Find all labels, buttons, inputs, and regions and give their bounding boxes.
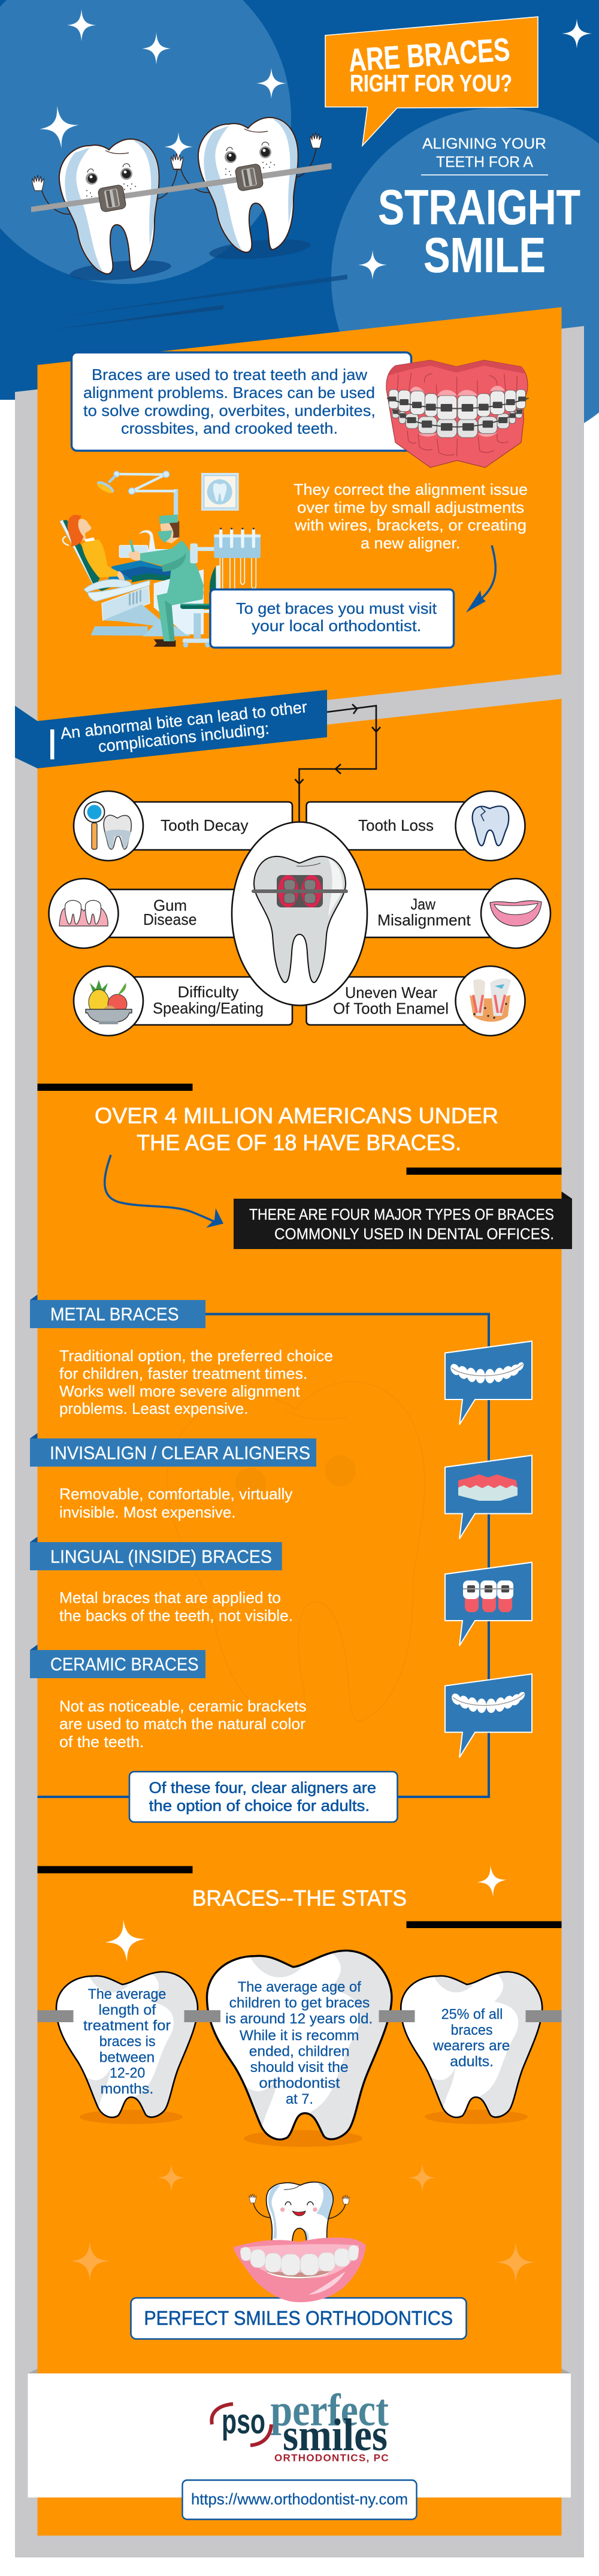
- item: tooth decay: [74, 791, 248, 861]
- item: difficulty speaking and eating: Difficulty: [177, 983, 238, 1001]
- logo: perfect smiles orthodontics: perfect: [271, 2385, 389, 2436]
- chair back: [60, 520, 100, 589]
- callout: clear aligners for adults: [129, 1772, 398, 1822]
- ribbon: abnormal bite: An abnormal bite can lead to other: [59, 698, 308, 743]
- illustration: dentist with patient: [60, 471, 261, 647]
- header sparkles: [37, 9, 592, 280]
- callout: clear aligners for adults: Of these four, clear aligners are: [149, 1779, 376, 1797]
- callout: visit your orthodontist: To get braces you must visit: [236, 599, 437, 617]
- stat tooth: adult wearers: [401, 1971, 545, 2124]
- stat tooth: average age: children to get braces: [229, 1995, 370, 2011]
- section: metal braces: [30, 1295, 532, 1425]
- section: lingual braces: LINGUAL (INSIDE) BRACES: [50, 1546, 272, 1567]
- item: difficulty speaking and eating: Speaking/Eating: [153, 999, 264, 1017]
- speech bubble: are braces right for you: RIGHT FOR YOU?: [350, 71, 512, 97]
- callout: four major types: THERE ARE FOUR MAJOR TYPES OF BRACES: [249, 1205, 554, 1223]
- stat tooth: adult wearers: wearers are: [432, 2038, 510, 2054]
- callout: four major types: [234, 1192, 572, 1249]
- item: gum disease: Disease: [143, 910, 196, 928]
- complication pills: [83, 802, 516, 1025]
- title: aligning your teeth for a straight smile: SMILE: [423, 227, 546, 283]
- section: metal braces: for children, faster treatment times.: [59, 1364, 307, 1382]
- stat tooth: treatment length: The average: [88, 1986, 166, 2002]
- section: invisalign: invisible. Most expensive.: [59, 1503, 236, 1521]
- instrument tray: [190, 528, 261, 596]
- title: aligning your teeth for a straight smile: TEETH FOR A: [436, 153, 533, 170]
- section: lingual braces: [30, 1537, 532, 1646]
- website url box: [182, 2480, 417, 2520]
- item: uneven wear of tooth enamel: [333, 966, 525, 1036]
- illustration: smiling tooth: [249, 2182, 349, 2243]
- callout: perfect smiles orthodontics: PERFECT SMILES ORTHODONTICS: [144, 2307, 453, 2329]
- logo: perfect smiles orthodontics: smiles: [283, 2410, 388, 2460]
- section: lingual braces: the backs of the teeth, not visible.: [59, 1606, 293, 1624]
- stat tooth: treatment length: between: [99, 2050, 155, 2065]
- stat tooth: adult wearers: 25% of all: [441, 2007, 503, 2022]
- item: difficulty speaking and eating: [74, 966, 264, 1036]
- stat tooth: treatment length: braces is: [99, 2034, 156, 2050]
- stat tooth: average age: [207, 1950, 395, 2147]
- icon: dental model with braces: [386, 360, 529, 467]
- orange panel: upper: [37, 307, 562, 732]
- callout: visit your orthodontist: your local orthodontist.: [252, 617, 422, 635]
- item: tooth loss: [358, 791, 525, 861]
- callout: perfect smiles orthodontics: [131, 2298, 466, 2339]
- watermark tooth: [167, 1381, 425, 1728]
- callout: four major types: COMMONLY USED IN DENTAL OFFICES.: [274, 1225, 554, 1243]
- logo: perfect smiles orthodontics: [211, 2385, 389, 2463]
- stat tooth: average age: should visit the: [250, 2059, 349, 2076]
- item: uneven wear of tooth enamel: Uneven Wear: [345, 984, 437, 1002]
- lamp arm: [95, 471, 178, 516]
- stat tooth: average age: at 7.: [286, 2091, 313, 2107]
- callout: what braces treat: alignment problems. Braces can be used: [83, 384, 375, 402]
- orange panel: lower: [37, 699, 562, 2536]
- illustration: two teeth with braces: [31, 117, 332, 283]
- section: ceramic braces: Not as noticeable, ceramic brackets: [59, 1697, 307, 1715]
- callout: clear aligners for adults: the option of choice for adults.: [149, 1797, 370, 1815]
- stat tooth: treatment length: treatment for: [83, 2017, 171, 2034]
- heading: braces the stats: BRACES--THE STATS: [192, 1886, 407, 1911]
- callout: visit your orthodontist: [210, 590, 454, 647]
- speed streaks: [53, 275, 347, 330]
- stat tooth: adult wearers: braces: [450, 2022, 492, 2038]
- section: lingual braces: Metal braces that are applied to: [59, 1588, 281, 1606]
- sink: [119, 530, 168, 559]
- stat tooth: treatment length: [56, 1971, 201, 2124]
- dentist: [128, 514, 204, 647]
- website url box: https://www.orthodontist-ny.com: [191, 2490, 408, 2508]
- callout: what braces treat: crossbites, and crooked teeth.: [121, 420, 338, 438]
- stat tooth: average age: While it is recomm: [240, 2028, 359, 2044]
- stat tooth: average age: ended, children: [249, 2044, 350, 2059]
- decorative bars: stats heading: [37, 1866, 562, 1928]
- item: gum disease: [49, 879, 196, 948]
- section: ceramic braces: CERAMIC BRACES: [50, 1654, 199, 1675]
- section: invisalign: Removable, comfortable, virtually: [59, 1485, 293, 1503]
- wall poster: [201, 473, 239, 511]
- section: ceramic braces: of the teeth.: [59, 1733, 144, 1751]
- center tooth with bracket: [232, 822, 367, 1006]
- stat tooth: adult wearers: adults.: [450, 2053, 494, 2070]
- item: jaw misalignment: Misalignment: [377, 911, 471, 929]
- title: aligning your teeth for a straight smile: ALIGNING YOUR: [422, 135, 546, 152]
- decorative bars: heading: [37, 1084, 562, 1175]
- arrow: to orthodontist box: [466, 545, 495, 613]
- text block: how braces correct alignment: [294, 481, 528, 552]
- item: tooth decay: Tooth Decay: [161, 816, 248, 834]
- ribbon: abnormal bite: [15, 690, 327, 768]
- section: invisalign: [30, 1433, 532, 1539]
- text block: how braces correct alignment: They correct the alignment issue: [294, 481, 528, 499]
- arrows: ribbon to complications: [295, 704, 380, 822]
- item: jaw misalignment: [377, 879, 550, 948]
- illustration: smiling lips: [233, 2237, 366, 2302]
- callout: what braces treat: to solve crowding, overbites, underbites,: [83, 402, 376, 420]
- speech bubble: are braces right for you: [325, 17, 538, 146]
- patient: [68, 515, 176, 591]
- item: jaw misalignment: Jaw: [411, 895, 435, 913]
- stool: [180, 565, 220, 647]
- arrow: to four types callout: [105, 1155, 223, 1228]
- section: invisalign: INVISALIGN / CLEAR ALIGNERS: [50, 1442, 310, 1464]
- section: metal braces: Traditional option, the preferred choice: [59, 1347, 333, 1365]
- logo: perfect smiles orthodontics: pso: [222, 2402, 265, 2441]
- ribbon: abnormal bite: complications including:: [97, 719, 270, 756]
- logo: perfect smiles orthodontics: ORTHODONTICS, PC: [274, 2453, 388, 2463]
- item: uneven wear of tooth enamel: Of Tooth Enamel: [333, 1000, 449, 1018]
- stat tooth: average age: The average age of: [238, 1979, 361, 1995]
- stat tooth: treatment length: months.: [101, 2081, 153, 2097]
- section: ceramic braces: [30, 1645, 532, 1757]
- section: ceramic braces: are used to match the natural color: [59, 1715, 305, 1733]
- chair base: [84, 569, 204, 637]
- item: tooth loss: Tooth Loss: [358, 816, 434, 834]
- speech bubble: are braces right for you: ARE BRACES: [347, 32, 511, 79]
- stat tooth: average age: is around 12 years old.: [225, 2011, 373, 2027]
- section: metal braces: Works well more severe alignment: [59, 1382, 300, 1400]
- connector line: types of braces: [37, 1314, 489, 1797]
- callout: what braces treat: Braces are used to treat teeth and jaw: [92, 366, 367, 384]
- sparkles: stats: [70, 1863, 536, 2282]
- stat tooth: treatment length: 12-20: [110, 2065, 145, 2081]
- callout: what braces treat: [72, 352, 411, 451]
- heading: over 4 million americans: OVER 4 MILLION AMERICANS UNDER: [95, 1103, 498, 1128]
- header background: [0, 0, 599, 448]
- text block: how braces correct alignment: over time by small adjustments: [297, 499, 524, 517]
- title: aligning your teeth for a straight smile: [378, 135, 580, 283]
- heading: over 4 million americans: [95, 1103, 498, 1155]
- heading: over 4 million americans: THE AGE OF 18 HAVE BRACES.: [137, 1130, 461, 1155]
- section: metal braces: problems. Least expensive.: [59, 1399, 248, 1417]
- text block: how braces correct alignment: a new aligner.: [361, 534, 460, 552]
- section: metal braces: METAL BRACES: [50, 1304, 179, 1325]
- text block: how braces correct alignment: with wires, brackets, or creating: [294, 516, 527, 534]
- gray wire bands: [37, 2010, 562, 2022]
- white logo band: [28, 2369, 571, 2497]
- stat tooth: average age: orthodontist: [259, 2075, 340, 2092]
- item: gum disease: Gum: [153, 897, 187, 915]
- stat tooth: treatment length: length of: [98, 2002, 156, 2019]
